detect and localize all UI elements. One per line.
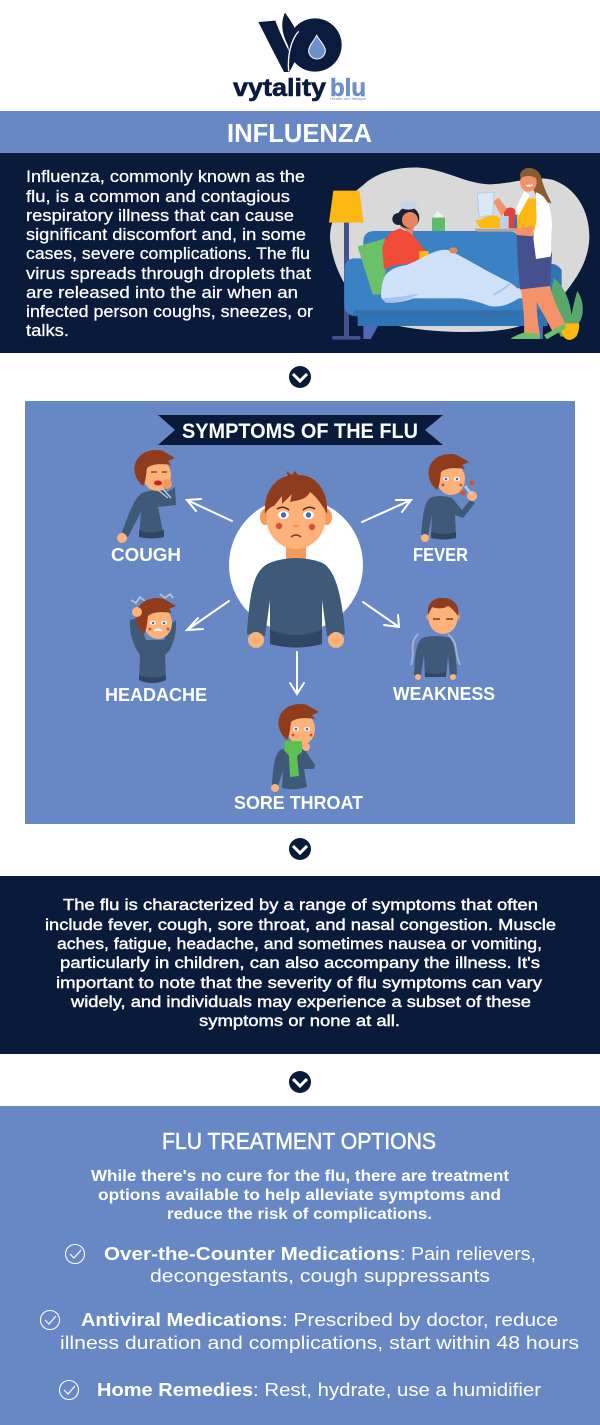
- intro text: infected person coughs, sneezes, or: [26, 303, 314, 321]
- panel: symptom description: [0, 876, 600, 1054]
- label: SORE THROAT: [234, 792, 364, 813]
- description text: particularly in children, can also accompany the illness. It's: [60, 955, 540, 972]
- option: over-the-counter medications: : Pain relievers,: [400, 1244, 536, 1264]
- logo: vytality blu: [233, 13, 366, 102]
- option: antiviral medications: : Prescribed by doctor, reduce: [282, 1310, 558, 1330]
- treatment intro text: While there's no cure for the flu, there are treatment: [91, 1168, 509, 1185]
- title: INFLUENZA: [227, 118, 372, 148]
- description text: widely, and individuals may experience a subset of these: [70, 994, 531, 1011]
- intro text: talks.: [26, 322, 69, 340]
- description text: important to note that the severity of flu symptoms can vary: [56, 975, 542, 992]
- arrow: down to treatment: [289, 1071, 311, 1093]
- intro text: significant discomfort and, in some: [26, 226, 306, 244]
- intro text: virus spreads through droplets that: [26, 265, 311, 283]
- logo mark: [258, 13, 342, 72]
- intro text: are released into the air when an: [26, 284, 298, 302]
- heading: FLU TREATMENT OPTIONS: [162, 1128, 436, 1154]
- intro text: respiratory illness that can cause: [26, 207, 294, 225]
- label: FEVER: [413, 544, 468, 565]
- logo wordmark: vytality: [233, 74, 326, 102]
- arrow: down to symptoms: [289, 366, 311, 388]
- symptom: weakness: [393, 598, 495, 704]
- description text: aches, fatigue, headache, and sometimes nausea or vomiting,: [57, 936, 542, 953]
- logo: vytality blu: Health and lifestyle: [330, 97, 366, 101]
- intro text: cases, severe complications. The flu: [26, 245, 310, 263]
- option: over-the-counter medications: decongestants, cough suppressants: [150, 1266, 490, 1286]
- treatment intro text: options available to help alleviate symptoms and: [98, 1187, 501, 1204]
- label: WEAKNESS: [393, 683, 495, 704]
- label: COUGH: [111, 544, 181, 565]
- option: home remedies: Home Remedies: [97, 1380, 253, 1400]
- intro text: flu, is a common and contagious: [26, 188, 290, 206]
- option: home remedies: [60, 1380, 541, 1400]
- option: home remedies: : Rest, hydrate, use a humidifier: [253, 1380, 541, 1400]
- symptom: fever: [413, 454, 477, 565]
- description text: [45, 897, 556, 1030]
- option: antiviral medications: Antiviral Medications: [81, 1310, 282, 1330]
- panel: symptoms of the flu: [25, 401, 575, 824]
- title band: [0, 111, 600, 153]
- label: HEADACHE: [105, 684, 207, 705]
- arrow: down to description: [289, 838, 311, 860]
- illustration: nurse caring for a sick woman on a sofa: [329, 167, 589, 340]
- logo: vytality blu: blu: [330, 74, 366, 102]
- description text: symptoms or none at all.: [199, 1013, 400, 1030]
- arrows to symptoms: [187, 499, 411, 694]
- description text: include fever, cough, sore throat, and nasal congestion. Muscle: [45, 917, 556, 934]
- panel: introduction: [0, 153, 600, 353]
- symptom: headache: [105, 594, 207, 705]
- heading ribbon: [158, 415, 443, 445]
- central boy illustration: [229, 471, 363, 648]
- treatment intro text: reduce the risk of complications.: [167, 1206, 432, 1223]
- option: antiviral medications: [40, 1310, 579, 1353]
- symptom: cough: [111, 450, 181, 565]
- intro text: Influenza, commonly known as the: [26, 168, 305, 186]
- option: over-the-counter medications: [66, 1244, 536, 1286]
- treatment intro text: [91, 1168, 509, 1223]
- option: over-the-counter medications: Over-the-Counter Medications: [104, 1244, 400, 1264]
- description text: The flu is characterized by a range of symptoms that often: [63, 897, 538, 914]
- symptom: sore throat: [234, 704, 364, 813]
- panel: flu treatment options: [0, 1106, 600, 1425]
- option: antiviral medications: illness duration and complications, start within 48 hours: [60, 1333, 579, 1353]
- intro text: [26, 168, 314, 340]
- heading ribbon: SYMPTOMS OF THE FLU: [182, 420, 418, 443]
